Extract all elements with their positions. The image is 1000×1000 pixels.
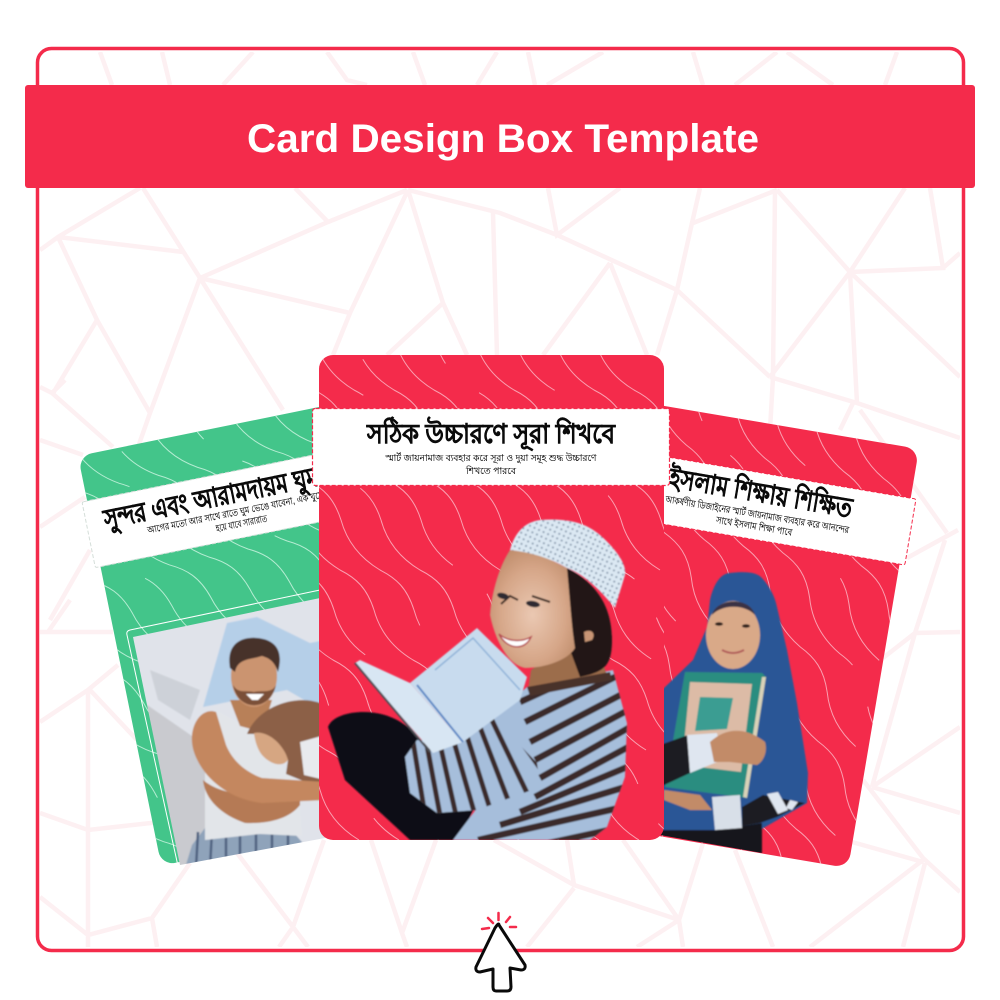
panel: left green card bbox=[80, 407, 325, 865]
photo: girl holding book bbox=[660, 572, 808, 856]
ribbon: center card bbox=[312, 408, 670, 486]
photo: couple in bed bbox=[133, 598, 325, 865]
heading: right card: ইসলাম শিক্ষায় শিক্ষিত bbox=[666, 461, 856, 523]
icon: click cursor bbox=[476, 913, 525, 991]
text: right card line 1: আকর্ষণীয় ডিজাইনের স্মার্ট জায়নামাজ ব্যবহার করে আনন্দের bbox=[664, 492, 851, 536]
title banner bbox=[25, 85, 975, 188]
text: left card line 1: আগের মতো আর সাথে রাতে ঘুম ভেঙে যাবেনা, এক ঘুমেই bbox=[145, 488, 329, 537]
photo frame line bbox=[127, 590, 320, 866]
photo: boy reading book bbox=[328, 520, 632, 845]
heading: center card: সঠিক উচ্চারণে সূরা শিখবে bbox=[366, 416, 616, 451]
text: left card line 2: হয়ে যাবে সারারাত bbox=[214, 513, 269, 535]
title: Card Design Box Template bbox=[247, 117, 759, 161]
panel: right red card bbox=[659, 406, 917, 866]
panel: center red card bbox=[312, 355, 670, 840]
heading: left card: সুন্দর এবং আরামদায়ম ঘুম bbox=[100, 462, 322, 537]
text: center card line 2: শিখতে পারবে bbox=[465, 465, 517, 477]
text: right card line 2: সাথে ইসলাম শিক্ষা পাবে bbox=[714, 514, 794, 539]
text: center card line 1: স্মার্ট জায়নামাজ ব্যবহার করে সূরা ও দুয়া সমূহ শুদ্ধ উচ্চারণে bbox=[385, 451, 598, 464]
ribbon: left card bbox=[82, 442, 389, 568]
ribbon: right card bbox=[550, 439, 916, 565]
